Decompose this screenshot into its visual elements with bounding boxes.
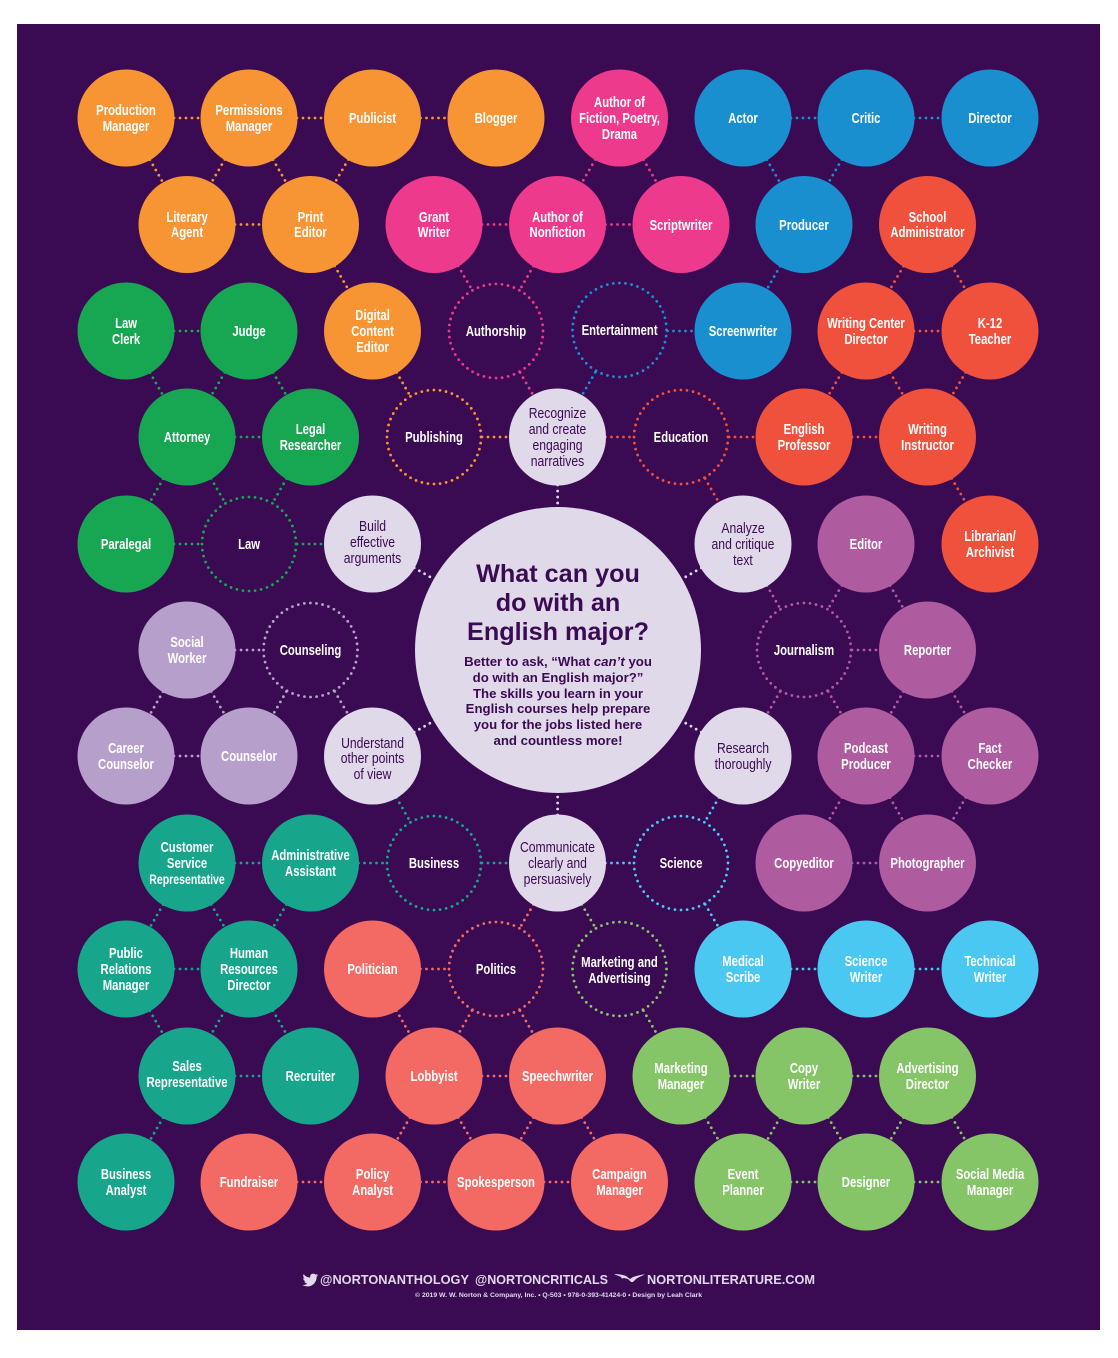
node: Attorney <box>138 388 236 486</box>
node: Campaign Manager: Campaign <box>592 1166 647 1182</box>
node: Politician <box>324 920 421 1018</box>
node: Legal Researcher: Researcher <box>280 437 341 453</box>
field rings <box>202 283 851 1016</box>
job cluster: education <box>756 176 1038 592</box>
intro text: English courses help prepare <box>466 701 650 716</box>
skill: Communicate clearly and persuasively: persuasively <box>524 871 592 887</box>
node: Permissions Manager: Permissions <box>215 102 283 118</box>
ring: Publishing: Publishing <box>405 429 463 445</box>
node: Event Planner: Event <box>728 1166 759 1182</box>
node: Copyeditor <box>756 814 852 912</box>
ring: Counseling <box>264 603 358 697</box>
node: Career Counselor: Counselor <box>98 756 154 772</box>
ring: Law <box>202 497 296 591</box>
node: Technical Writer: Writer <box>974 969 1006 985</box>
skill: Recognize and create engaging narratives: and create <box>529 421 586 437</box>
node: Business Analyst: Business <box>101 1166 151 1182</box>
node: School Administrator <box>879 176 976 273</box>
node: Public Relations Manager: Manager <box>103 977 149 993</box>
node: Copyeditor: Copyeditor <box>774 855 834 871</box>
job cluster: science <box>694 920 1038 1018</box>
skill: Communicate clearly and persuasively <box>509 814 606 912</box>
node: Advertising Director: Director <box>906 1076 949 1092</box>
node: Law Clerk: Clerk <box>112 331 141 347</box>
node: Advertising Director <box>879 1028 976 1124</box>
node: Sales Representative: Representative <box>146 1074 228 1090</box>
skill: Understand other points of view <box>324 708 421 804</box>
node: Law Clerk: Law <box>115 315 138 331</box>
node: Sales Representative <box>138 1028 236 1124</box>
connectors: entertainment (blue) <box>558 118 990 437</box>
node: Public Relations Manager: Public <box>109 945 143 961</box>
node: Scriptwriter <box>632 176 730 273</box>
node: Social Worker: Social <box>170 634 204 650</box>
node: Director <box>942 70 1038 166</box>
node: Sales Representative: Sales <box>172 1058 202 1074</box>
ring: Business: Business <box>409 855 459 871</box>
job cluster: journalism <box>756 496 1038 912</box>
node: Technical Writer <box>942 920 1038 1018</box>
node: Marketing Manager <box>632 1028 730 1124</box>
node: Print Editor: Print <box>298 209 324 225</box>
node: Event Planner: Planner <box>722 1182 764 1198</box>
skill: Analyze and critique text: text <box>733 552 753 568</box>
node: Advertising Director: Advertising <box>896 1060 959 1076</box>
node: Reporter <box>879 602 976 698</box>
node: Publicist: Publicist <box>349 110 397 126</box>
node: Author of Nonfiction: Nonfiction <box>530 224 586 240</box>
node: Recruiter: Recruiter <box>286 1068 335 1084</box>
node: Career Counselor <box>78 708 174 804</box>
node: Science Writer <box>818 920 914 1018</box>
skill: Build effective arguments: effective <box>350 534 395 550</box>
node: English Professor: English <box>784 421 824 437</box>
job cluster: entertainment <box>694 70 1038 380</box>
node: Blogger: Blogger <box>475 110 517 126</box>
website: NORTONLITERATURE.COM <box>647 1272 815 1287</box>
node: Author of Fiction, Poetry, Drama: Drama <box>602 126 638 142</box>
skill: Understand other points of view: Understand <box>341 735 404 751</box>
footer <box>303 1272 815 1299</box>
ring: Journalism <box>757 603 851 697</box>
node: Director: Director <box>968 110 1012 126</box>
ring: Politics <box>449 922 543 1016</box>
icon: twitter bird <box>303 1274 318 1286</box>
ring: Authorship <box>449 284 543 378</box>
node: Paralegal: Paralegal <box>101 536 151 552</box>
node: Judge <box>200 282 298 380</box>
ring: Marketing and Advertising <box>572 922 666 1016</box>
node: School Administrator: School <box>909 209 946 225</box>
node: Actor: Actor <box>728 110 758 126</box>
node: Author of Fiction, Poetry, Drama <box>571 70 668 166</box>
skill: Analyze and critique text: and critique <box>712 536 774 552</box>
node: Social Worker <box>138 602 236 698</box>
node: Recruiter <box>262 1028 359 1124</box>
node: Spokesperson <box>448 1134 544 1230</box>
node: Literary Agent <box>138 176 236 273</box>
node: Medical Scribe: Scribe <box>726 969 760 985</box>
node: Print Editor <box>262 176 359 273</box>
node: Lobbyist: Lobbyist <box>411 1068 458 1084</box>
handle: @NORTONANTHOLOGY: @NORTONANTHOLOGY <box>320 1272 469 1287</box>
node: Grant Writer <box>386 176 482 273</box>
node: Scriptwriter: Scriptwriter <box>650 217 712 233</box>
node: Administrative Assistant <box>262 814 359 912</box>
skill: Understand other points of view: of view <box>354 766 392 782</box>
connectors: publishing (orange) <box>126 118 558 437</box>
intro text: and countless more! <box>494 733 622 748</box>
node: Podcast Producer <box>818 708 914 804</box>
node: Administrative Assistant: Assistant <box>285 863 337 879</box>
node: Human Resources Director: Human <box>230 945 268 961</box>
node: Technical Writer: Technical <box>964 953 1016 969</box>
skill: Build effective arguments: Build <box>359 518 386 534</box>
node: Fact Checker: Fact <box>978 740 1002 756</box>
node: English Professor <box>756 388 852 486</box>
node: Speechwriter <box>509 1028 606 1124</box>
job cluster: marketing <box>632 1028 1038 1230</box>
skill: Research thoroughly: thoroughly <box>715 756 772 772</box>
node: Literary Agent: Literary <box>166 209 208 225</box>
node: Counselor <box>200 708 298 804</box>
job cluster: counseling <box>78 602 298 804</box>
node: Attorney: Attorney <box>164 429 211 445</box>
node: Science Writer: Science <box>845 953 887 969</box>
node: Customer Service Representative: Customer <box>161 839 213 855</box>
node: Policy Analyst <box>324 1134 421 1230</box>
intro text: you for the jobs listed here <box>474 717 642 732</box>
skill: Research thoroughly <box>694 708 792 804</box>
node: Spokesperson: Spokesperson <box>457 1174 535 1190</box>
ring: Entertainment <box>572 283 666 377</box>
skill: Recognize and create engaging narratives: Recognize <box>529 405 586 421</box>
node: Marketing Manager: Marketing <box>654 1060 708 1076</box>
node: Social Worker: Worker <box>168 650 206 666</box>
node: Photographer: Photographer <box>890 855 965 871</box>
ring: Science <box>634 816 728 910</box>
ring: Authorship: Authorship <box>466 323 526 339</box>
node: Digital Content Editor: Editor <box>356 339 389 355</box>
node: Paralegal <box>78 496 174 592</box>
connectors: politics (coral) <box>249 863 620 1182</box>
node: Literary Agent: Agent <box>171 224 204 240</box>
node: K-12 Teacher: Teacher <box>969 331 1011 347</box>
node: Designer: Designer <box>842 1174 890 1190</box>
ring: Politics: Politics <box>476 961 516 977</box>
skill: Recognize and create engaging narratives: engaging <box>532 437 583 453</box>
job cluster: publishing <box>78 70 544 380</box>
ring: Entertainment: Entertainment <box>582 322 658 338</box>
node: Editor <box>818 496 914 592</box>
job cluster: authorship <box>386 70 730 273</box>
node: Customer Service Representative <box>138 814 236 912</box>
node: Human Resources Director: Director <box>227 977 271 993</box>
skill: Build effective arguments: arguments <box>344 550 402 566</box>
node: Producer: Producer <box>779 217 829 233</box>
title: English major? <box>467 618 649 646</box>
central circle <box>415 507 701 793</box>
skill: Understand other points of view: other points <box>341 750 405 766</box>
node: Author of Fiction, Poetry, Drama: Fiction, Poetry, <box>579 110 660 126</box>
node: Production Manager <box>78 70 174 166</box>
skill: Analyze and critique text: Analyze <box>721 520 765 536</box>
node: Social Media Manager <box>942 1134 1038 1230</box>
node: Grant Writer: Grant <box>419 209 450 225</box>
node: Human Resources Director: Resources <box>220 961 278 977</box>
node: Campaign Manager <box>571 1134 668 1230</box>
node: K-12 Teacher <box>942 282 1038 380</box>
node: Event Planner <box>694 1134 792 1230</box>
copyright line: © 2019 W. W. Norton & Company, Inc. • Q-503 • 978-0-393-41424-0 • Design by Leah Clark <box>415 1291 702 1299</box>
connectors: education (red) <box>558 224 990 544</box>
node: Actor <box>694 70 792 166</box>
node: Reporter: Reporter <box>904 642 951 658</box>
node: Copy Writer: Copy <box>790 1060 819 1076</box>
node: Campaign Manager: Manager <box>596 1182 643 1198</box>
job cluster: politics <box>200 920 668 1230</box>
node: Judge: Judge <box>232 323 266 339</box>
skill: Analyze and critique text <box>694 496 792 592</box>
node: Customer Service Representative: Service <box>167 855 207 871</box>
icon: seagull <box>614 1274 645 1282</box>
node: Production Manager: Manager <box>103 118 149 134</box>
node: Fundraiser: Fundraiser <box>220 1174 278 1190</box>
node: Author of Nonfiction: Author of <box>532 209 584 225</box>
skill: Recognize and create engaging narratives <box>509 388 606 486</box>
node: Public Relations Manager <box>78 920 174 1018</box>
node: Permissions Manager: Manager <box>226 118 272 134</box>
node: Author of Fiction, Poetry, Drama: Author of <box>594 94 646 110</box>
node: Fact Checker <box>942 708 1038 804</box>
node: Marketing Manager: Manager <box>658 1076 704 1092</box>
node: Business Analyst <box>78 1134 174 1230</box>
ring: Journalism: Journalism <box>774 642 834 658</box>
skill: Communicate clearly and persuasively: clearly and <box>528 855 587 871</box>
node: Speechwriter: Speechwriter <box>522 1068 593 1084</box>
connectors: law (green) <box>126 331 372 544</box>
node: Permissions Manager <box>200 70 298 166</box>
skill: Research thoroughly: Research <box>717 740 769 756</box>
node: Digital Content Editor: Content <box>351 323 395 339</box>
intro text: The skills you learn in your <box>473 686 643 701</box>
node: Medical Scribe: Medical <box>722 953 764 969</box>
node: Blogger <box>448 70 544 166</box>
node: Fundraiser <box>200 1134 298 1230</box>
node: Editor: Editor <box>850 536 882 552</box>
node: Customer Service Representative: Representative <box>149 872 225 887</box>
connectors: marketing (light green) <box>558 863 990 1182</box>
skill circles <box>324 388 792 912</box>
node: Digital Content Editor <box>324 282 421 380</box>
node: Podcast Producer: Producer <box>841 756 891 772</box>
ring: Counseling: Counseling <box>280 642 341 658</box>
skill: Recognize and create engaging narratives: narratives <box>531 453 584 469</box>
node: Politician: Politician <box>347 961 398 977</box>
node: Author of Nonfiction <box>509 176 606 273</box>
ring: Business <box>387 816 481 910</box>
job cluster: law <box>78 282 359 592</box>
node: Legal Researcher: Legal <box>296 421 325 437</box>
connectors: counseling (lilac) <box>126 650 372 756</box>
connectors: journalism (purple) <box>743 544 990 863</box>
title: do with an <box>496 589 620 617</box>
node: Lobbyist <box>386 1028 482 1124</box>
ring: Publishing <box>387 390 481 484</box>
node: Writing Instructor: Writing <box>908 421 947 437</box>
node: English Professor: Professor <box>778 437 830 453</box>
node: Digital Content Editor: Digital <box>355 307 390 323</box>
ring: Marketing and Advertising: Advertising <box>588 970 651 986</box>
node: Writing Center Director <box>818 282 914 380</box>
node: Production Manager: Production <box>96 102 156 118</box>
node: Librarian/Archivist: Archivist <box>966 544 1015 560</box>
node: Librarian/Archivist <box>942 496 1038 592</box>
node: Print Editor: Editor <box>294 224 327 240</box>
node: Science Writer: Writer <box>850 969 882 985</box>
skill: Build effective arguments <box>324 496 421 592</box>
node: Counselor: Counselor <box>221 748 277 764</box>
node: Librarian/Archivist: Librarian/ <box>964 528 1016 544</box>
ring: Marketing and Advertising: Marketing and <box>581 954 658 970</box>
node: Public Relations Manager: Relations <box>101 961 151 977</box>
connectors: science (cyan) <box>558 756 990 969</box>
node: Critic <box>818 70 914 166</box>
ring: Law: Law <box>238 536 261 552</box>
node: Writing Instructor <box>879 388 976 486</box>
node: Policy Analyst: Policy <box>356 1166 390 1182</box>
node: Grant Writer: Writer <box>418 224 450 240</box>
node: Publicist <box>324 70 421 166</box>
node: Policy Analyst: Analyst <box>352 1182 394 1198</box>
intro text: Better to ask, “What can’t you <box>464 654 652 669</box>
node: School Administrator: Administrator <box>890 224 965 240</box>
node: Business Analyst: Analyst <box>106 1182 147 1198</box>
ring: Education: Education <box>654 429 708 445</box>
node: Fact Checker: Checker <box>968 756 1012 772</box>
node: Screenwriter <box>694 282 792 380</box>
node: Law Clerk <box>78 282 174 380</box>
handle: @NORTONCRITICALS: @NORTONCRITICALS <box>475 1272 608 1287</box>
node: Writing Center Director: Director <box>844 331 888 347</box>
node: K-12 Teacher: K-12 <box>978 315 1002 331</box>
node: Legal Researcher <box>262 388 359 486</box>
node: Administrative Assistant: Administrative <box>271 847 350 863</box>
connectors: business (teal) <box>126 756 558 1182</box>
node: Critic: Critic <box>852 110 880 126</box>
connectors: authorship (pink) <box>434 118 681 437</box>
node: Copy Writer <box>756 1028 852 1124</box>
node: Designer <box>818 1134 914 1230</box>
node: Medical Scribe <box>694 920 792 1018</box>
node: Screenwriter: Screenwriter <box>709 323 777 339</box>
skill: Communicate clearly and persuasively: Communicate <box>520 839 595 855</box>
ring: Science: Science <box>660 855 702 871</box>
node: Social Media Manager: Manager <box>967 1182 1013 1198</box>
node: Producer <box>756 176 852 273</box>
job cluster: business <box>78 814 359 1230</box>
node: Podcast Producer: Podcast <box>844 740 889 756</box>
node: Writing Center Director: Writing Center <box>827 315 905 331</box>
ring: Education <box>634 390 728 484</box>
node: Photographer <box>879 814 976 912</box>
intro text: do with an English major?” <box>473 670 643 685</box>
node: Career Counselor: Career <box>108 740 144 756</box>
connectors: skills to centre (light) <box>372 437 743 863</box>
node: Human Resources Director <box>200 920 298 1018</box>
title: What can you <box>476 560 640 588</box>
node: Social Media Manager: Social Media <box>956 1166 1025 1182</box>
node: Copy Writer: Writer <box>788 1076 820 1092</box>
node: Writing Instructor: Instructor <box>901 437 954 453</box>
